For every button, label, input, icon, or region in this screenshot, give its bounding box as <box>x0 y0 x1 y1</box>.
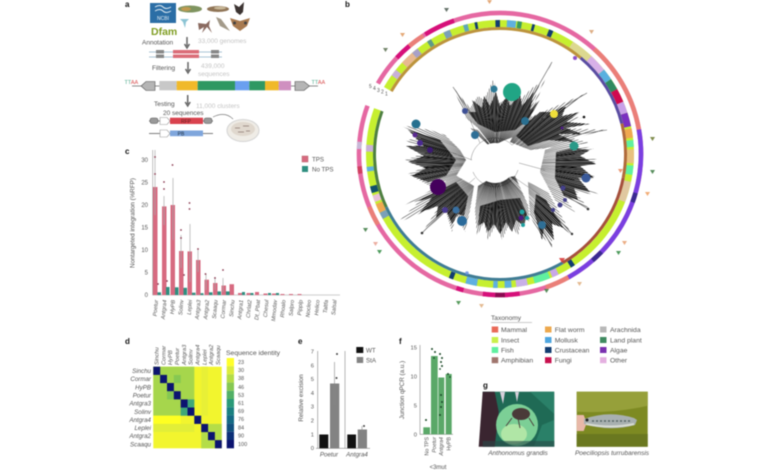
row labels: Antgra2 <box>128 433 152 440</box>
x labels: Antgra3 <box>195 299 203 321</box>
legend entries: Algae <box>610 347 628 354</box>
axes: Relative excision <box>298 374 305 422</box>
y axis and title: 15 <box>141 226 149 232</box>
panel f: junction qPCR <box>399 337 453 470</box>
x labels: Solinv <box>178 298 186 315</box>
x labels: Mmodav <box>271 298 279 322</box>
outer markers <box>363 0 655 308</box>
legend entries: Other <box>610 358 628 364</box>
panel a: pipeline <box>124 0 325 142</box>
clade circles <box>412 83 590 235</box>
axes: 3 <box>311 404 314 410</box>
legend entries: Mollusk <box>555 337 578 344</box>
legend entries: Arachnida <box>610 327 641 334</box>
annotated elements diagram <box>149 50 222 58</box>
x labels <box>424 437 452 457</box>
hairy fan tips <box>420 88 570 238</box>
axes: 15 <box>411 346 417 352</box>
dense fan cores <box>420 88 570 238</box>
axes: 7 <box>311 350 314 356</box>
legend: TPS <box>312 156 324 164</box>
panel d: heatmap <box>125 337 281 448</box>
colour bar legend: 76 <box>238 417 244 423</box>
row labels: HyPB <box>135 384 151 392</box>
axes: 10 <box>411 374 417 380</box>
column labels: Sinchu <box>154 346 160 365</box>
constructs <box>149 118 213 138</box>
ring numbers: 5 <box>369 84 372 90</box>
filtering step: 439,000 <box>201 63 225 70</box>
ring numbers: 1 <box>385 92 388 98</box>
x labels: Nocleo <box>305 300 313 318</box>
legend title: Taxonomy <box>491 315 522 322</box>
x labels: Antgra1 <box>237 300 245 321</box>
annotation step: 33,000 genomes <box>198 38 247 45</box>
ring 1 inner <box>323 0 677 331</box>
caption: Poeciliopsis turrubarensis <box>575 450 650 457</box>
column labels: Scaaqu <box>216 345 222 365</box>
x labels: Leplei <box>187 299 194 315</box>
panel label a: a <box>125 0 130 9</box>
x labels: Antgra4 <box>161 300 168 321</box>
constructs: RFP <box>181 119 192 125</box>
column labels: Solinv <box>189 348 195 365</box>
axes: 1 <box>311 432 314 438</box>
colour bar legend <box>226 350 281 448</box>
TPS bars <box>153 187 302 295</box>
x labels: Cormar <box>220 299 228 319</box>
icon: NCBI logo <box>150 3 176 23</box>
panel label b: b <box>345 0 350 9</box>
icons: species <box>178 2 250 33</box>
heatmap cells <box>153 367 222 448</box>
transposon architecture <box>124 80 325 90</box>
phylogenetic tree <box>412 62 607 247</box>
legend <box>302 156 334 174</box>
x labels: Antgra4 <box>345 452 368 458</box>
x labels: Chesul <box>263 299 271 318</box>
column labels: Antgra4 <box>196 345 202 366</box>
x labels: Helico <box>314 300 321 316</box>
error bars and data points <box>154 150 224 292</box>
x labels <box>320 452 368 458</box>
y axis and title: 25 <box>141 180 149 186</box>
Dfam logo: Dfam <box>151 26 177 38</box>
ring numbers: 2 <box>381 90 384 96</box>
legend entries: Fungi <box>555 358 572 364</box>
panel label g: g <box>483 381 488 390</box>
photo: Anthonomus grandis <box>479 392 554 447</box>
row labels: Solinv <box>134 409 152 416</box>
panel label e: e <box>298 337 303 346</box>
bars <box>319 353 367 448</box>
photo: Poeciliopsis turrubarensis <box>577 392 648 447</box>
x labels: Antgra2 <box>203 299 211 321</box>
axes: 4 <box>311 391 315 397</box>
row labels: Sinchu <box>132 368 152 375</box>
axes <box>298 350 370 452</box>
transposon architecture: TTAA <box>124 80 138 86</box>
annotation step: Annotation <box>142 40 173 46</box>
colour bar legend: 61 <box>238 401 244 407</box>
legend entries: Fish <box>501 347 514 354</box>
colour bar legend: Sequence identity <box>226 350 281 357</box>
x labels: Salsal <box>331 299 339 315</box>
x labels: Antgra4 <box>439 437 445 457</box>
bars <box>423 356 452 434</box>
axes: 0 <box>414 432 417 438</box>
panel g: photos <box>479 381 650 457</box>
axes: 5 <box>414 404 417 410</box>
long tree spikes <box>422 62 607 247</box>
axes <box>399 345 453 438</box>
icon: petri dish <box>227 120 259 142</box>
No TPS bars <box>158 287 279 295</box>
legend entries <box>492 326 642 364</box>
x labels: HyPB <box>170 299 177 314</box>
column labels <box>154 344 222 366</box>
filtering step: sequences <box>198 71 230 78</box>
row labels: Cormar <box>130 376 152 383</box>
axes: 0 <box>311 446 314 452</box>
column labels: Antgra3 <box>182 344 188 366</box>
row labels: Antgra4 <box>128 417 152 424</box>
y axis and title: 30 <box>141 158 149 164</box>
x labels: Poetur <box>320 452 339 458</box>
y axis and title: 20 <box>141 203 149 209</box>
testing step <box>154 95 240 117</box>
colour bar legend: 53 <box>238 393 244 399</box>
colour bar legend: 100 <box>238 442 247 448</box>
data points <box>425 348 451 421</box>
panel label c: c <box>125 147 130 156</box>
filtering step <box>152 62 230 78</box>
ring 3 middle <box>316 0 684 338</box>
y axis and title <box>130 150 340 299</box>
icon: curved arrow <box>213 114 233 119</box>
legend: StA <box>366 358 377 364</box>
colour bar legend: 38 <box>238 376 244 382</box>
constructs: PB <box>178 132 185 138</box>
taxonomy legend <box>491 315 642 364</box>
ring numbers <box>369 84 388 98</box>
x labels: Taltfa <box>323 300 330 314</box>
panel label d: d <box>125 337 130 346</box>
column labels: Leplei <box>202 349 208 365</box>
icon: NCBI logo: NCBI <box>157 16 169 22</box>
x labels: Dt_Pbat <box>254 299 262 320</box>
y axis and title: Nontargeted integration (%RFP) <box>130 178 136 268</box>
row labels: Antgra3 <box>128 400 152 408</box>
legend entries: Flat worm <box>555 327 585 334</box>
panel b: circular phylogeny <box>344 0 656 308</box>
axes: 6 <box>311 364 314 370</box>
axes: 2 <box>311 418 314 424</box>
y axis and title: 10 <box>141 248 149 254</box>
legend entries: Land plant <box>610 337 642 344</box>
branches <box>445 110 545 205</box>
colour bar legend: 84 <box>238 426 244 432</box>
x labels <box>153 298 339 322</box>
testing step: 11,000 clusters <box>196 103 240 110</box>
column labels: HyPB <box>168 350 174 365</box>
axes: Junction qPCR (a.u.) <box>399 361 406 419</box>
column labels: Poetur <box>175 347 181 365</box>
legend: No TPS <box>312 166 334 174</box>
row labels: Poetur <box>133 392 152 400</box>
legend <box>356 347 377 364</box>
ring numbers: 4 <box>373 86 376 92</box>
x labels: Poetur <box>153 299 160 317</box>
panel c: nontargeted integration bar chart <box>125 147 340 322</box>
filtering step: Filtering <box>152 65 176 72</box>
column labels: Antgra2 <box>209 344 215 366</box>
y axis and title: 0 <box>145 293 149 299</box>
x labels: Scaaqu <box>212 300 219 319</box>
x labels: No TPS <box>424 437 430 455</box>
x labels: Chrlat2 <box>246 299 254 318</box>
annotation step <box>142 37 247 48</box>
legend: WT <box>366 348 376 354</box>
testing step: Testing <box>154 101 175 108</box>
panel e: relative excision <box>298 337 377 458</box>
column labels: Cormar <box>161 345 167 365</box>
y axis and title: 5 <box>145 270 149 276</box>
legend entries: Crustacean <box>555 347 590 354</box>
x labels: Pipplp <box>297 300 304 316</box>
legend entries: Mammal <box>501 327 528 334</box>
x labels: Poetur <box>432 437 438 453</box>
axes: 5 <box>311 377 314 383</box>
colour bar legend: 69 <box>238 409 244 415</box>
row labels <box>128 368 152 448</box>
x labels: Rhoalo <box>280 300 287 318</box>
panel label f: f <box>399 337 402 346</box>
transposon architecture: TTAA <box>312 80 325 86</box>
row labels: Leplei <box>134 425 152 432</box>
x labels: Salpro <box>289 300 296 316</box>
colour bar legend: 23 <box>238 360 244 366</box>
taxonomy rings <box>301 0 699 353</box>
x labels: HyPB <box>446 437 452 451</box>
x labels: Sinchu <box>229 300 236 317</box>
caption: Anthonomus grandis <box>487 450 549 457</box>
legend entries: Insect <box>501 337 519 344</box>
legend entries: Amphibian <box>501 358 533 364</box>
ring 5 outer <box>301 0 699 353</box>
colour bar legend: 46 <box>238 385 244 391</box>
testing step: 20 sequences <box>163 110 204 117</box>
colour bar legend: 90 <box>238 434 244 440</box>
row labels: Scaaqu <box>130 441 152 448</box>
ring numbers: 3 <box>377 88 380 94</box>
colour bar legend: 30 <box>238 368 244 374</box>
